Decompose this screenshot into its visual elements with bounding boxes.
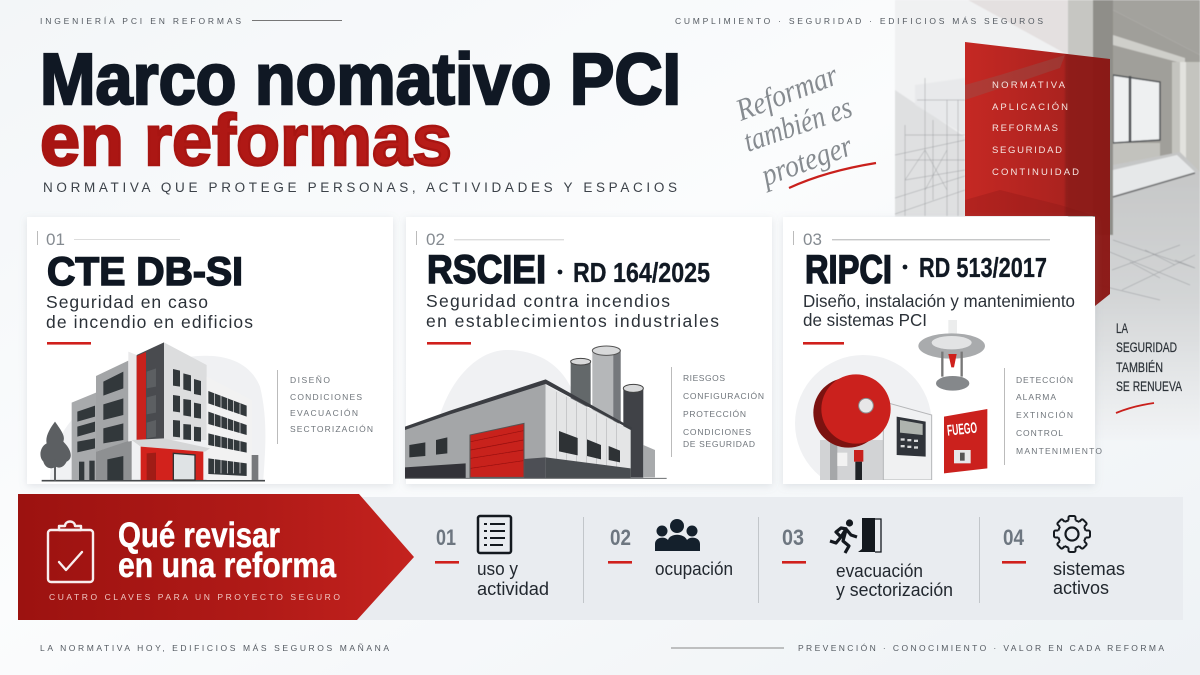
sketch of scaffolding	[895, 78, 965, 216]
panel keywords: REFORMAS	[992, 123, 1058, 134]
item 02	[608, 519, 733, 579]
panel keywords	[992, 80, 1079, 178]
side list	[683, 373, 764, 449]
card description	[46, 292, 253, 332]
card description: Seguridad en caso	[46, 292, 208, 312]
side list: CONDICIONES	[290, 392, 362, 402]
card heading: CTE DB-SI	[47, 250, 243, 294]
tree	[40, 422, 71, 481]
title	[40, 40, 681, 181]
side list: DE SEGURIDAD	[683, 439, 755, 449]
side list: SECTORIZACIÓN	[290, 424, 373, 434]
banner heading: en una reforma	[118, 546, 336, 585]
item 04: 04	[1003, 525, 1025, 550]
item 04: activos	[1053, 577, 1109, 598]
illustration: alarm bell, panel, sprinkler and call point: FUEGO	[946, 420, 978, 440]
handwritten note: Reformar	[730, 57, 843, 128]
side list: ALARMA	[1016, 392, 1056, 402]
side note	[1116, 321, 1182, 413]
side list: CONTROL	[1016, 428, 1063, 438]
handwritten note	[730, 57, 876, 193]
footer left: LA NORMATIVA HOY, EDIFICIOS MÁS SEGUROS MAÑANA	[40, 643, 389, 653]
title: Marco nomativo PCI	[40, 40, 681, 120]
side note: LA	[1116, 321, 1128, 336]
side note: SE RENUEVA	[1116, 379, 1182, 394]
side note: SEGURIDAD	[1116, 340, 1177, 355]
panel: card 3 RIPCI	[783, 217, 1102, 492]
item 03: 03	[782, 525, 804, 550]
item 02: 02	[610, 525, 631, 550]
illustration: alarm bell, panel, sprinkler and call point	[795, 320, 987, 492]
icon: gear	[1054, 516, 1090, 552]
panel: card 2 RSCIEI	[405, 217, 772, 484]
regulation reference: RD 513/2017	[919, 252, 1047, 283]
red translucent panel	[965, 42, 1110, 306]
item 02: ocupación	[655, 558, 733, 579]
side list: EVACUACIÓN	[290, 408, 358, 418]
footer right: PREVENCIÓN · CONOCIMIENTO · VALOR EN CADA REFORMA	[798, 643, 1164, 653]
panel: card 1 CTE DB-SI	[27, 217, 393, 484]
card heading: RIPCI	[805, 248, 892, 292]
item 01: uso y	[477, 558, 519, 579]
item 03: y sectorización	[836, 579, 953, 600]
side list: DETECCIÓN	[1016, 375, 1073, 385]
side list: CONDICIONES	[683, 427, 751, 437]
card heading: RSCIEI	[427, 248, 546, 292]
panel keywords: CONTINUIDAD	[992, 167, 1079, 178]
illustration: industrial building	[405, 346, 667, 478]
side list: PROTECCIÓN	[683, 409, 746, 419]
side list	[290, 375, 373, 434]
subtitle: NORMATIVA QUE PROTEGE PERSONAS, ACTIVIDADES Y ESPACIOS	[43, 180, 677, 195]
card description	[426, 291, 719, 331]
panel keywords: SEGURIDAD	[992, 145, 1062, 156]
card description	[803, 291, 1075, 330]
top left label: INGENIERÍA PCI EN REFORMAS	[40, 16, 241, 26]
side list: MANTENIMIENTO	[1016, 446, 1102, 456]
card number: 03	[803, 230, 822, 249]
side note: TAMBIÉN	[1116, 360, 1163, 375]
handwritten note: también es	[739, 89, 856, 159]
side list: RIESGOS	[683, 373, 725, 383]
side list	[1016, 375, 1102, 456]
item 04	[1002, 516, 1125, 598]
top right label: CUMPLIMIENTO · SEGURIDAD · EDIFICIOS MÁS SEGUROS	[675, 16, 1043, 26]
side list: CONFIGURACIÓN	[683, 391, 764, 401]
regulation reference: RD 164/2025	[573, 257, 710, 288]
panel keywords: APLICACIÓN	[992, 102, 1068, 113]
item 01	[435, 516, 549, 599]
item 01: actividad	[477, 578, 549, 599]
band: checklist	[18, 494, 1183, 620]
icon: clipboard	[48, 522, 93, 582]
banner heading	[118, 516, 336, 585]
icon: evacuation	[830, 518, 881, 553]
item 04: sistemas	[1053, 558, 1125, 579]
red arrow banner	[18, 494, 414, 620]
card description: de sistemas PCI	[803, 310, 927, 330]
card number: 02	[426, 230, 445, 249]
card description: Diseño, instalación y mantenimiento	[803, 291, 1075, 311]
handwritten note: proteger	[755, 127, 858, 193]
blueprint lines	[1098, 240, 1195, 300]
illustration: office building	[40, 342, 265, 481]
icon: list	[478, 516, 511, 553]
side list: EXTINCIÓN	[1016, 410, 1073, 420]
item 01: 01	[436, 525, 456, 550]
icon: people	[655, 519, 700, 551]
banner tagline: CUATRO CLAVES PARA UN PROYECTO SEGURO	[49, 592, 340, 602]
title: en reformas	[40, 101, 452, 181]
card description: de incendio en edificios	[46, 312, 253, 332]
card description: en establecimientos industriales	[426, 311, 719, 331]
card number: 01	[46, 230, 65, 249]
construction photo panel	[895, 0, 1200, 440]
card description: Seguridad contra incendios	[426, 291, 670, 311]
side list: DISEÑO	[290, 375, 330, 385]
item 03	[782, 518, 953, 600]
panel keywords: NORMATIVA	[992, 80, 1066, 91]
banner heading: Qué revisar	[118, 516, 280, 555]
item 03: evacuación	[836, 560, 923, 581]
